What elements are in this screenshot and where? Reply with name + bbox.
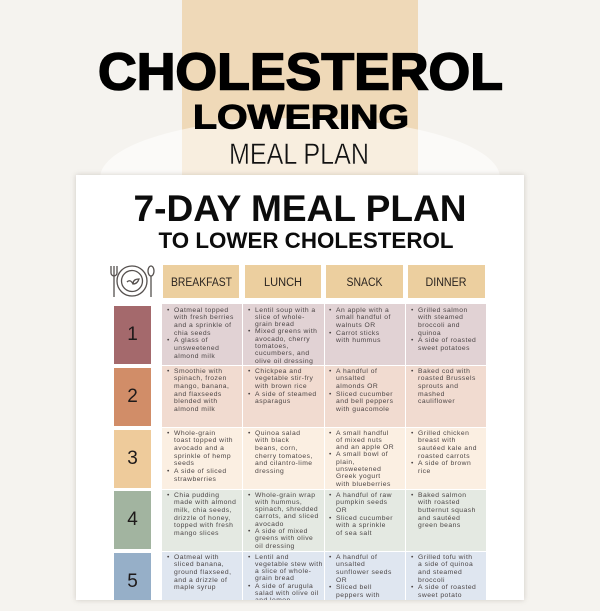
day 4 snack: OR [336,507,347,514]
day 2 snack: unsalted [336,375,365,382]
day 5 snack: A handful of [336,554,377,560]
day 3 snack: • [329,430,332,436]
day 2 breakfast: • [167,368,170,374]
day 5 breakfast: maple syrup [174,584,216,591]
day 2 box: 2 [127,386,138,407]
day 5 box [114,553,151,600]
day 1 breakfast: and a sprinkle of [174,322,232,329]
day 1 dinner: A side of roasted [418,337,476,344]
day 1 snack: An apple with a [336,306,389,314]
day 5 lunch: grain bread [255,575,294,582]
header: dinner: DINNER [426,275,467,289]
day 3 dinner: sautéed kale and [418,445,477,452]
day 3 dinner: • [411,460,414,467]
day 3 dinner: A side of brown [418,460,471,467]
main title: CHOLESTEROL [98,44,503,102]
day 2 lunch: Chickpea and [255,368,302,374]
day 4 breakfast: Chia pudding [174,492,219,498]
day 2 breakfast: blended with [174,398,218,405]
day 5 snack [325,552,405,600]
day 1 lunch: cucumbers, and [255,350,310,357]
day 5 breakfast: ground flaxseed, [174,569,231,576]
day 4 lunch: oil dressing [255,543,295,550]
day 3 snack: and an apple OR [336,444,394,451]
sheet title: 7-DAY MEAL PLAN [134,188,466,229]
day 4 breakfast: milk, chia seeds, [174,507,232,514]
day 4 breakfast: topped with fresh [174,522,233,529]
day 1 snack [325,304,405,365]
day 5 lunch: vegetable stew with [255,561,323,568]
day 3 breakfast: sprinkle of hemp [174,453,231,460]
day 1 snack: • [329,330,332,337]
day 3 lunch: • [248,430,251,436]
day 3 breakfast: strawberries [174,476,216,483]
day 1 breakfast: Oatmeal topped [174,306,229,314]
day 5 lunch: salad with olive oil [255,590,319,597]
day 3 breakfast: • [167,430,170,436]
day 2 snack: • [329,368,332,374]
day 3 breakfast: seeds [174,460,194,467]
day 5 breakfast: • [167,554,170,560]
day 4 snack: • [329,492,332,498]
main title: LOWERING [193,98,409,136]
day 2 lunch: asparagus [255,398,291,405]
day 4 lunch: greens with olive [255,535,313,542]
day 1 lunch: grain bread [255,321,294,328]
day 4 breakfast: drizzle of honey, [174,515,231,522]
sheet panel [76,175,524,600]
day 3 box [114,430,151,488]
day 3 snack: of mixed nuts [336,437,382,444]
day 1 lunch: • [248,328,251,335]
day 3 dinner: roasted carrots [418,453,470,460]
day 4 dinner: Baked salmon [418,492,466,498]
day 3 box: 3 [127,448,138,469]
day 4 lunch: A side of mixed [255,528,308,535]
day 1 breakfast: with fresh berries [174,314,234,321]
day 5 lunch: A side of arugula [255,583,313,590]
day 4 lunch: • [248,528,251,535]
day 5 dinner: • [411,554,414,560]
day 2 snack: Sliced cucumber [336,391,393,398]
day 5 lunch: Lentil and [255,554,289,560]
day 3 snack: • [329,451,332,458]
day 3 snack: with blueberries [336,481,391,488]
day 2 snack: and bell peppers [336,398,393,405]
day 2 lunch: • [248,391,251,398]
day 5 snack: OR [336,577,347,584]
day 2 dinner: mashed [418,391,445,398]
day 3 breakfast: • [167,468,170,475]
day 3 dinner: rice [418,468,431,475]
main title [98,44,503,171]
day 2 dinner [406,366,486,427]
pale arch [100,118,500,238]
day 3 dinner: • [411,430,414,436]
day 5 lunch [243,552,324,600]
day 1 lunch: slice of whole- [255,314,305,321]
day 2 dinner: cauliflower [418,398,455,405]
day 3 dinner: Grilled chicken [418,430,469,436]
day 1 breakfast: almond milk [174,353,215,360]
day 4 lunch: carrots, and sliced [255,513,319,520]
day 3 lunch: and cilantro-lime [255,460,313,467]
day 5 snack: unsalted [336,561,365,568]
day 3 lunch: dressing [255,468,284,475]
day 4 snack: Sliced cucumber [336,515,393,522]
day 3 lunch [243,428,324,489]
day 1 lunch: avocado, cherry [255,336,310,343]
day 2 breakfast: spinach, frozen [174,375,227,382]
day 1 dinner: Grilled salmon [418,306,468,314]
day 2 breakfast [162,366,242,427]
day 2 breakfast: almond milk [174,406,215,413]
day 5 lunch: • [248,554,251,560]
day 5 snack: Sliced bell [336,584,372,591]
day 3 lunch: Quinoa salad [255,430,300,436]
sheet title: TO LOWER CHOLESTEROL [158,228,454,253]
day 3 dinner [406,428,486,489]
day 4 lunch: Whole-grain wrap [255,492,315,498]
day 5 snack: • [329,554,332,560]
day 1 dinner: • [411,337,414,344]
day 4 dinner: with roasted [418,499,460,506]
day 1 box: 1 [127,324,138,345]
day 3 breakfast: avocado and a [174,445,224,452]
day 1 dinner [406,304,486,365]
day 3 snack: Greek yogurt [336,473,381,480]
day 3 breakfast: A side of sliced [174,468,227,475]
day 3 breakfast: Whole-grain [174,430,216,436]
day 1 lunch: Lentil soup with a [255,306,316,314]
day 4 breakfast [162,490,242,551]
day 3 snack: A small handful [336,430,389,436]
day 2 lunch [243,366,324,427]
day 2 breakfast: mango, banana, [174,383,229,390]
day 5 dinner: Grilled tofu with [418,554,473,560]
header: snack: SNACK [346,275,383,289]
day 1 lunch: Mixed greens with [255,328,317,335]
day 3 snack: A small bowl of [336,451,388,458]
day 1 snack: walnuts OR [336,322,376,329]
day 5 snack: peppers with [336,592,380,599]
day 4 snack: A handful of raw [336,492,392,498]
day 3 lunch: cherry tomatoes, [255,453,313,460]
day 2 breakfast: and flaxseeds [174,391,222,398]
day 1 box [114,306,151,364]
day 5 breakfast [162,552,242,600]
day 4 snack: with a sprinkle [336,522,386,529]
day 1 lunch: olive oil dressing [255,358,313,365]
day 2 breakfast: Smoothie with [174,368,223,374]
day 3 snack [325,428,405,489]
day 2 snack: A handful of [336,368,377,374]
day 2 snack: • [329,391,332,398]
day 1 dinner: sweet potatoes [418,345,470,352]
day 5 breakfast: sliced banana, [174,561,224,568]
day 4 box: 4 [127,509,138,530]
day 1 dinner: with steamed [418,314,463,321]
day 1 snack: • [329,306,332,314]
day 4 dinner: butternut squash [418,507,476,514]
day 2 dinner: Baked cod with [418,368,470,374]
day 3 dinner: breast with [418,437,456,444]
day 5 dinner: broccoli [418,577,445,584]
day 5 box: 5 [127,571,138,592]
day 4 snack: • [329,515,332,522]
day 5 dinner [406,552,486,600]
header: lunch: LUNCH [264,275,302,289]
day 3 breakfast: toast topped with [174,437,233,444]
day 2 dinner: • [411,368,414,374]
day 4 lunch: • [248,492,251,498]
header: breakfast [163,265,239,298]
day 5 dinner: and steamed [418,569,462,576]
day 1 lunch: tomatoes, [255,343,289,350]
day 1 breakfast: • [167,337,170,344]
day 5 dinner: sweet potato [418,592,462,599]
day 5 dinner: a side of quinoa [418,561,473,568]
day 1 lunch [243,304,324,365]
day 1 dinner: quinoa [418,330,441,337]
day 2 snack: with guacomole [336,406,389,413]
day 4 dinner: green beans [418,522,461,529]
day 4 box [114,491,151,549]
day 5 snack: • [329,584,332,591]
day 1 dinner: • [411,306,414,314]
day 4 snack: pumpkin seeds [336,499,388,506]
day 4 dinner: • [411,492,414,498]
day 3 lunch: beans, corn, [255,445,298,452]
header: lunch [245,265,321,298]
day 1 dinner: broccoli and [418,322,460,329]
day 3 breakfast [162,428,242,489]
day 2 snack: almonds OR [336,383,378,390]
beige background panel [182,0,418,175]
day 1 breakfast: unsweetened [174,345,219,352]
day 4 breakfast: mango slices [174,530,219,537]
day 5 snack: sunflower seeds [336,569,392,576]
day 1 snack: with hummus [336,337,381,344]
day 2 snack [325,366,405,427]
day 3 snack: plain, [336,459,355,466]
day 1 breakfast: • [167,306,170,314]
day 5 breakfast: and a drizzle of [174,577,227,584]
day 3 lunch: with black [255,437,289,444]
day 4 lunch: avocado [255,521,284,528]
day 4 snack [325,490,405,551]
day 4 snack: of sea salt [336,530,372,537]
day 5 dinner: • [411,584,414,591]
main title: MEAL PLAN [229,138,369,171]
day 4 breakfast: • [167,492,170,498]
day 1 breakfast [162,304,242,365]
header: dinner [408,265,485,298]
day 2 lunch: with brown rice [255,383,307,390]
day 2 lunch: vegetable stir-fry [255,375,313,382]
day 4 lunch: with hummus, [255,499,302,506]
day 5 breakfast: Oatmeal with [174,554,219,560]
day 4 breakfast: made with almond [174,499,236,506]
day 2 lunch: • [248,368,251,374]
day 5 dinner: A side of roasted [418,584,476,591]
header: snack [326,265,403,298]
day 1 breakfast: A glass of [174,337,208,344]
day 1 snack: Carrot sticks [336,330,380,337]
day 2 lunch: A side of steamed [255,391,317,398]
day 5 lunch: a slice of whole- [255,568,311,575]
day 1 snack: small handful of [336,314,391,321]
day 4 dinner: and sautéed [418,515,460,522]
day 5 lunch: • [248,583,251,590]
day 4 lunch [243,490,324,551]
day 3 snack: unsweetened [336,466,381,473]
day 2 dinner: roasted Brussels [418,375,476,382]
day 2 box [114,368,151,426]
sheet title [134,188,466,253]
day 1 lunch: • [248,306,251,314]
day 4 lunch: spinach, shredded [255,506,318,513]
day 2 dinner: sprouts and [418,383,458,390]
day 4 dinner [406,490,486,551]
icon: plate and cutlery [110,265,155,297]
day 1 breakfast: chia seeds [174,330,211,337]
